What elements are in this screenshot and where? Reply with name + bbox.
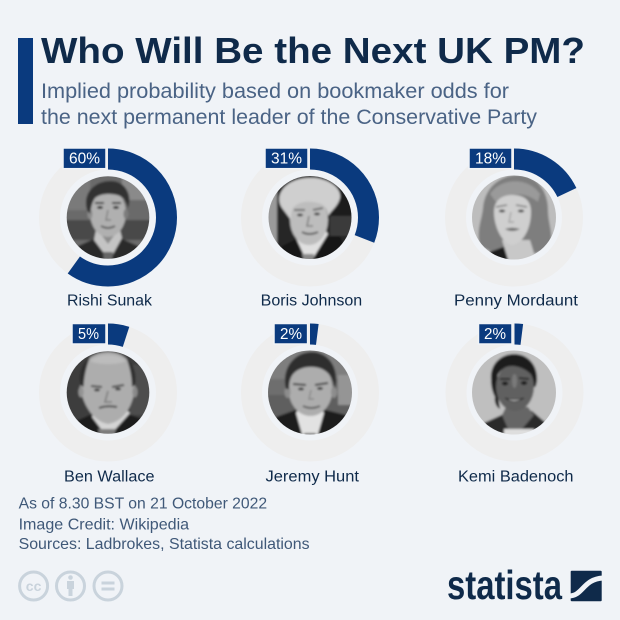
footer notes [19,496,310,553]
percentage label: 31% [271,150,302,168]
photo: Kemi Badenoch [472,350,556,434]
panel: Kemi Badenoch [456,324,574,486]
donut chart: 18% [456,159,572,276]
photo: Ben Wallace [66,351,150,434]
photo: Penny Mordaunt [472,176,556,260]
icon: creative commons licence [20,572,122,600]
icon: creative commons licence: cc [26,578,42,594]
name label: Boris Johnson [261,293,362,310]
percentage label: 18% [475,150,506,168]
percentage label: 2% [484,326,506,343]
subtitle [41,79,537,129]
percentage label [469,148,512,169]
panel: Rishi Sunak [50,148,166,310]
donut chart: 31% [252,159,368,276]
icon: statista mark [569,571,603,601]
statista logo: statista [447,562,563,608]
percentage label [265,148,308,169]
panel: Jeremy Hunt [252,324,368,486]
percentage label: 2% [280,326,302,343]
donut chart: 5% [50,334,166,451]
title: Who Will Be the Next UK PM? [41,30,585,71]
footer notes: Image Credit: Wikipedia [19,516,189,534]
photo: Boris Johnson [268,176,352,259]
percentage label [478,324,512,344]
donut chart: 2% [252,334,368,451]
footer notes: Sources: Ladbrokes, Statista calculations [19,536,310,553]
name label: Penny Mordaunt [454,293,579,310]
donut chart: 2% [456,334,573,451]
name label: Kemi Badenoch [458,469,574,486]
percentage label [63,148,106,169]
footer notes: As of 8.30 BST on 21 October 2022 [19,496,267,512]
panel: Penny Mordaunt [454,148,579,310]
title accent bar [18,38,33,124]
photo: Rishi Sunak [66,176,150,259]
subtitle: Implied probability based on bookmaker odds for [41,79,509,103]
percentage label [274,324,308,344]
panel: Boris Johnson [252,148,368,310]
percentage label [72,324,106,344]
percentage label: 5% [78,326,99,343]
photo: Jeremy Hunt [268,350,352,434]
subtitle: the next permanent leader of the Conservative Party [41,105,537,129]
name label: Ben Wallace [64,469,154,486]
percentage label: 60% [69,150,100,168]
panel: Ben Wallace [50,324,166,486]
donut chart: 60% [50,159,166,276]
name label: Jeremy Hunt [266,469,360,486]
name label: Rishi Sunak [67,293,152,310]
